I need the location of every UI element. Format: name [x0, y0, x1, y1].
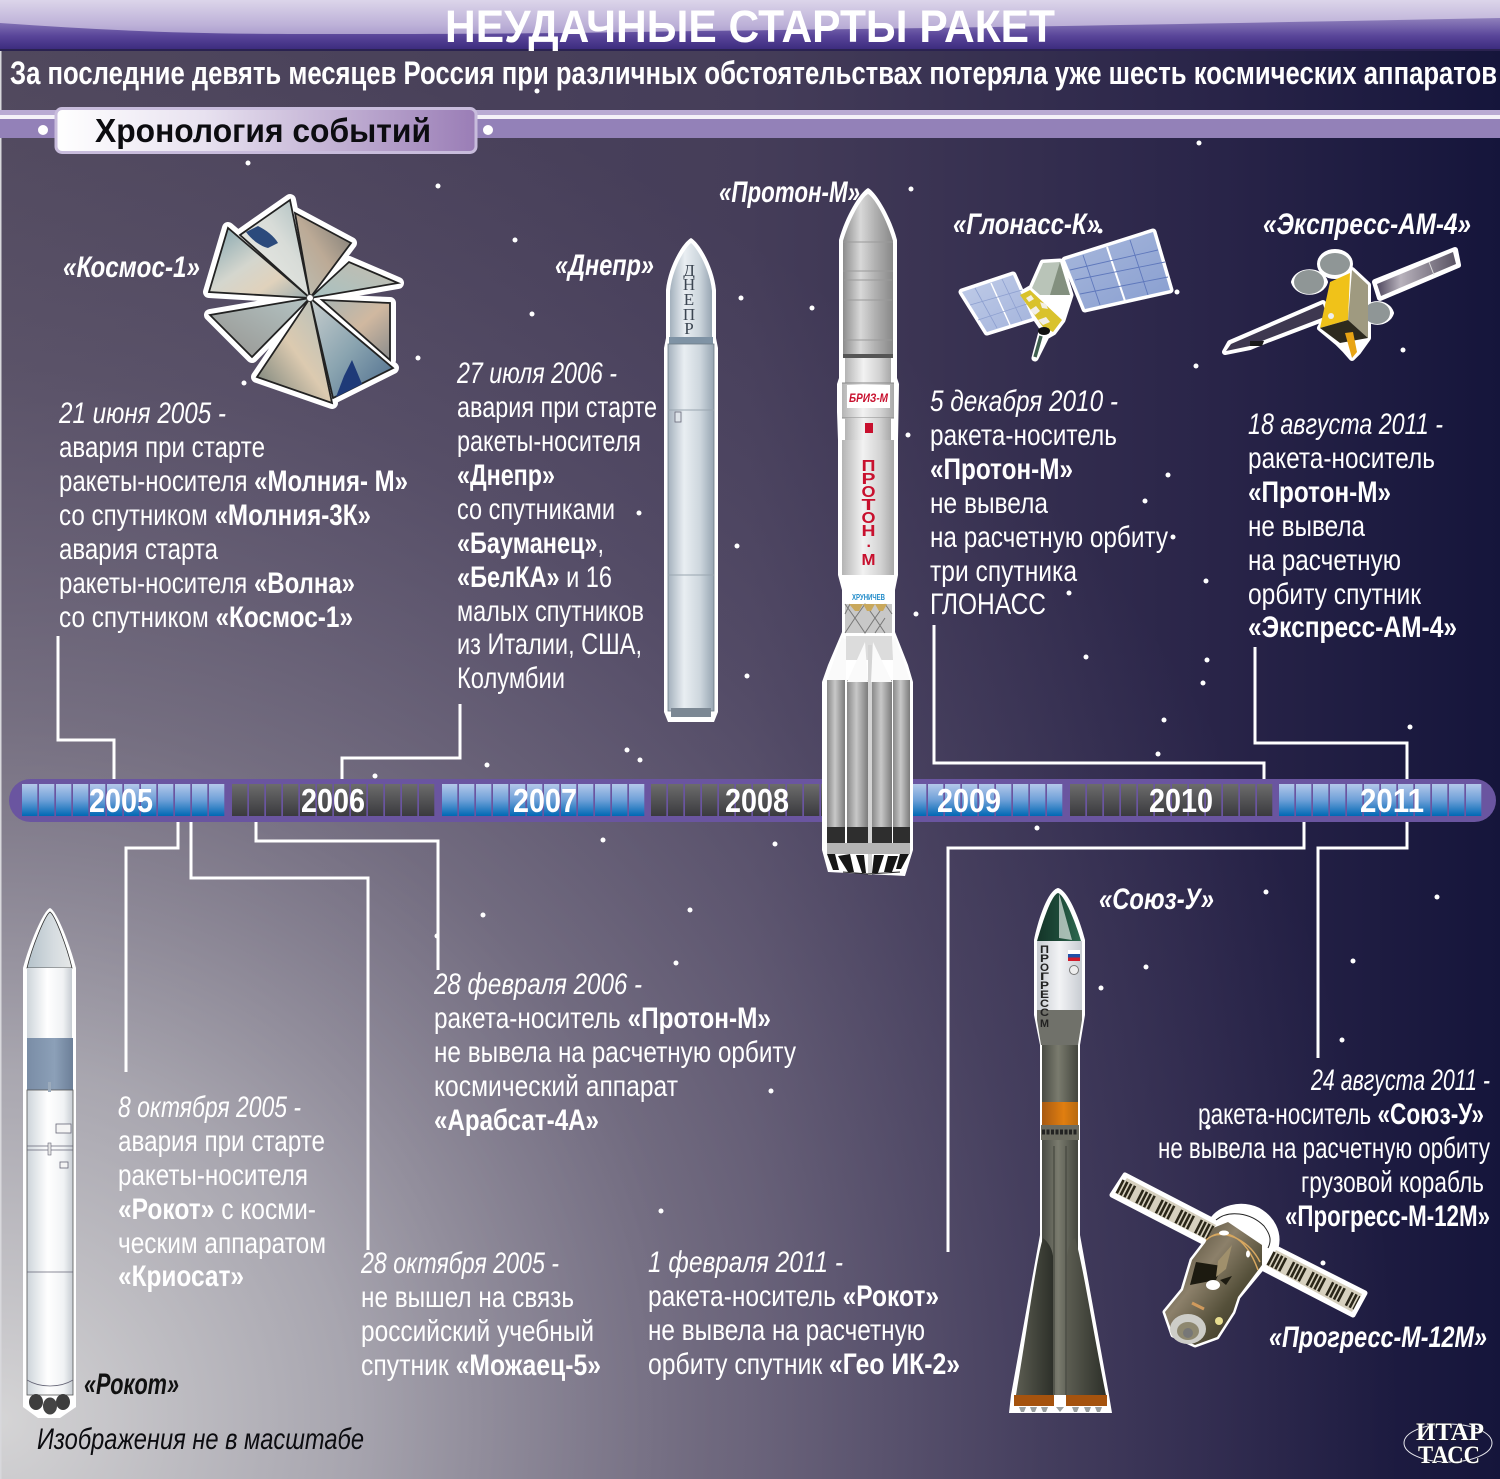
year labels: 2005 [89, 782, 153, 819]
label: Glonass-K: «Глонасс-К» [953, 208, 1100, 241]
timeline [9, 779, 1496, 822]
proton vertical lettering: Н [862, 523, 876, 540]
text block: 28 October 2005 [360, 1247, 601, 1382]
rocket: Proton-M [822, 188, 913, 876]
text block: 8 October 2005: ческим аппаратом [118, 1227, 326, 1260]
section heading: chronology: Хронология событий [95, 112, 431, 149]
text block: 5 December 2010: на расчетную орбиту [930, 521, 1168, 554]
proton vertical lettering: Т [862, 497, 876, 514]
label: Proton-M: «Протон-М» [719, 176, 860, 209]
text block: 5 December 2010: ракета-носитель [930, 419, 1117, 452]
text block: 27 July 2006: 27 июля 2006 - [456, 357, 617, 390]
rocket: Soyuz-U [1009, 888, 1112, 1413]
proton vertical lettering: Р [862, 471, 876, 488]
dnepr lettering: П [683, 305, 695, 324]
text block: 27 July 2006: ракеты-носителя [457, 425, 641, 458]
rocket: Rokot [23, 908, 76, 1418]
progress M vertical lettering: Е [1040, 989, 1049, 1001]
dnepr lettering: Н [683, 275, 695, 294]
text block: 27 July 2006: малых спутников [457, 595, 644, 628]
text block: 18 August 2011: «Протон-М» [1248, 476, 1391, 509]
text block: 8 October 2005: ракеты-носителя [118, 1159, 308, 1192]
text block: 21 June 2005: авария старта [59, 533, 218, 566]
dnepr lettering: Д [683, 261, 695, 280]
text block: 27 July 2006: «Бауманец», [457, 527, 604, 560]
year labels: 2006 [301, 782, 365, 819]
text block: 27 July 2006: со спутниками [457, 493, 615, 526]
text block: 28 February 2006 [433, 968, 796, 1137]
text block: 21 June 2005: ракеты-носителя «Волна» [59, 567, 355, 600]
label: Soyuz-U: «Союз-У» [1099, 883, 1214, 916]
year labels: 2011 [1360, 782, 1424, 819]
text block: 1 February 2011: ракета-носитель «Рокот» [648, 1280, 939, 1313]
text block: 21 June 2005: со спутником «Космос-1» [59, 601, 353, 634]
year labels: 2010 [1149, 782, 1213, 819]
text block: 1 February 2011 [648, 1246, 960, 1381]
progress M vertical lettering: С [1040, 1007, 1049, 1019]
text block: 21 June 2005: ракеты-носителя «Молния- М» [59, 465, 408, 498]
text block: 28 February 2006: 28 февраля 2006 - [433, 968, 642, 1001]
proton vertical lettering: О [862, 510, 876, 527]
logo: ITAR-TASS [1404, 1419, 1492, 1469]
label: Dnepr: «Днепр» [555, 249, 654, 282]
progress M vertical lettering: Р [1040, 953, 1049, 965]
progress M vertical lettering: Г [1040, 971, 1050, 983]
text block: 28 February 2006: ракета-носитель «Протон-М» [434, 1002, 771, 1035]
label: Kosmos-1: «Космос-1» [63, 251, 200, 284]
year labels [89, 782, 1424, 819]
logo: ITAR-TASS: ТАСС [1418, 1442, 1480, 1469]
text block: 1 February 2011: не вывела на расчетную [648, 1314, 925, 1347]
segments 2007 [442, 784, 644, 816]
text block: 8 October 2005: 8 октября 2005 - [118, 1091, 301, 1124]
text block: 21 June 2005 [58, 397, 408, 634]
text block: 27 July 2006: из Италии, США, [457, 628, 642, 661]
text block: 1 February 2011: орбиту спутник «Гео ИК-2» [648, 1348, 960, 1381]
text block: 5 December 2010: 5 декабря 2010 - [930, 385, 1118, 418]
note: not to scale: Изображения не в масштабе [37, 1423, 364, 1456]
section heading: chronology [56, 108, 476, 152]
text block: 8 October 2005: «Рокот» с косми- [118, 1193, 316, 1226]
satellite: Kosmos-1 [209, 200, 398, 403]
text block: 27 July 2006: Колумбии [457, 662, 565, 695]
text block: 5 December 2010: ГЛОНАСС [930, 588, 1046, 621]
segments 2010 [1070, 784, 1272, 816]
progress M vertical lettering: М [1040, 1018, 1049, 1030]
text block: 8 October 2005 [118, 1091, 326, 1293]
logo: ITAR-TASS: ИТАР [1416, 1419, 1484, 1446]
timeline bar [9, 779, 1496, 822]
proton vertical lettering: П [862, 458, 876, 475]
text block: 28 February 2006: космический аппарат [434, 1070, 678, 1103]
progress M vertical lettering: Р [1040, 980, 1049, 992]
text block: 18 August 2011: «Экспресс-АМ-4» [1248, 611, 1457, 644]
rocket: Dnepr [664, 238, 718, 722]
text block: 5 December 2010: не вывела [930, 487, 1048, 520]
progress M vertical lettering: П [1040, 944, 1049, 956]
spacecraft: Progress-M-12M [1112, 1175, 1365, 1345]
year labels: 2008 [725, 782, 789, 819]
text block: 28 October 2005: спутник «Можаец-5» [361, 1349, 601, 1382]
proton vertical lettering: · [866, 538, 872, 555]
text block: 28 February 2006: не вывела на расчетную орбиту [434, 1036, 796, 1069]
briz-m label: БРИЗ-М [849, 391, 889, 405]
text block: 21 June 2005: 21 июня 2005 - [58, 397, 226, 430]
text block: 5 December 2010: три спутника [930, 555, 1077, 588]
satellite: Express-AM-4 [1225, 250, 1458, 358]
header band [0, 0, 1500, 51]
section header rule [0, 110, 1500, 138]
segments 2006 [232, 784, 434, 816]
satellite: Glonass-K [962, 232, 1170, 358]
text block: 1 February 2011: 1 февраля 2011 - [648, 1246, 843, 1279]
text block: 27 July 2006: «БелКА» и 16 [457, 561, 612, 594]
label: Rokot: «Рокот» [84, 1368, 179, 1401]
khrunichev label: ХРУНИЧЕВ [852, 593, 885, 602]
text block: 21 June 2005: авария при старте [59, 431, 265, 464]
proton vertical lettering [862, 458, 876, 569]
text block: 28 October 2005: российский учебный [361, 1315, 594, 1348]
progress M vertical lettering [1040, 944, 1050, 1030]
briz-m label [847, 385, 890, 408]
connector lines [58, 625, 1407, 1252]
dnepr lettering: Е [684, 290, 694, 309]
segments 2009 [860, 784, 1062, 816]
text block: 28 February 2006: «Арабсат-4А» [434, 1104, 599, 1137]
segments 2008 [651, 784, 853, 816]
text block: 18 August 2011: на расчетную [1248, 544, 1401, 577]
stars [242, 88, 1440, 1266]
proton vertical lettering: О [862, 484, 876, 501]
text block: 18 August 2011 [1248, 408, 1457, 644]
progress M vertical lettering: С [1040, 998, 1049, 1010]
text block: 18 August 2011: не вывела [1248, 510, 1365, 543]
text block: 28 October 2005: 28 октября 2005 - [360, 1247, 559, 1280]
text block: 18 August 2011: 18 августа 2011 - [1248, 408, 1443, 441]
text block: 8 October 2005: «Криосат» [118, 1260, 244, 1293]
year labels: 2007 [513, 782, 577, 819]
text block: 27 July 2006: авария при старте [457, 391, 657, 424]
text block: 21 June 2005: со спутником «Молния-3К» [59, 499, 371, 532]
boosters [827, 637, 910, 875]
text block: 24 August 2011 [1158, 1064, 1490, 1233]
text block: 18 August 2011: ракета-носитель [1248, 442, 1435, 475]
title: НЕУДАЧНЫЕ СТАРТЫ РАКЕТ [445, 1, 1055, 52]
dnepr lettering: Р [684, 319, 694, 338]
segments 2005 [22, 784, 224, 816]
year labels: 2009 [937, 782, 1001, 819]
proton vertical lettering: М [862, 552, 876, 569]
dnepr lettering [683, 261, 695, 338]
progress M vertical lettering: О [1040, 962, 1049, 974]
text block: 18 August 2011: орбиту спутник [1248, 578, 1422, 611]
text block: 5 December 2010 [930, 385, 1168, 621]
text block: 5 December 2010: «Протон-М» [930, 453, 1073, 486]
segments 2011 [1279, 784, 1481, 816]
text block: 27 July 2006 [456, 357, 657, 695]
text block: 28 October 2005: не вышел на связь [361, 1281, 574, 1314]
text block: 27 July 2006: «Днепр» [457, 459, 555, 492]
text block: 8 October 2005: авария при старте [118, 1125, 325, 1158]
